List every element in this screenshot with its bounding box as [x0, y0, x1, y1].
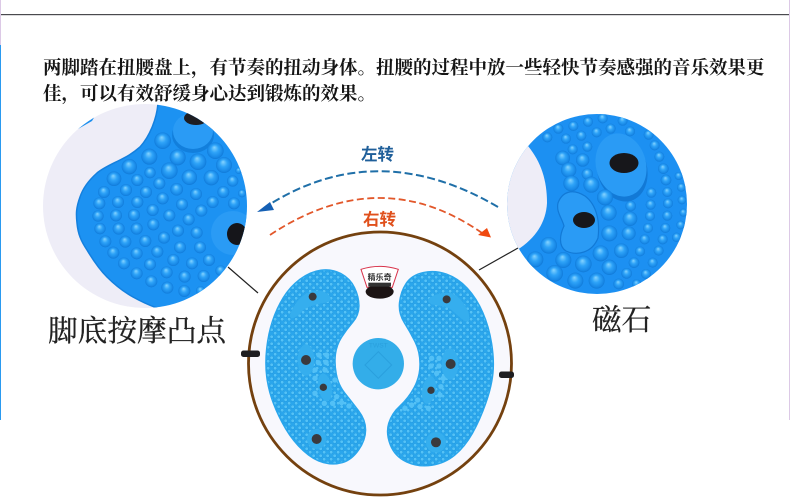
magnified circle: magnet [500, 112, 689, 297]
description text: 佳，可以有效舒缓身心达到锻炼的效果。 [43, 85, 376, 105]
magnet boss, kidney [558, 192, 599, 253]
foot pad: right [387, 272, 493, 466]
magnified circle: massage bumps [43, 103, 255, 310]
center cap: TWST [369, 343, 388, 350]
top rule [0, 14, 790, 15]
pad bosses [290, 291, 334, 449]
label: massage bumps: 脚底按摩凸点 [48, 316, 226, 348]
disc body [248, 232, 512, 495]
magnets [301, 293, 327, 444]
description text: 两脚踏在扭腰盘上，有节奏的扭动身体。扭腰的过程中放一些轻快节奏感强的音乐效果更 [43, 59, 765, 79]
pad bosses [420, 293, 469, 453]
boss with magnet, right [211, 211, 246, 255]
magnets [427, 295, 456, 447]
connector line: massage bumps [228, 267, 258, 293]
label: left turn: 左转 [361, 145, 394, 164]
description text [43, 58, 765, 105]
brand logo [361, 266, 398, 299]
center cap [353, 338, 404, 389]
massage bumps [92, 132, 246, 297]
boss with magnet, top [172, 111, 214, 153]
side tab: left [241, 350, 260, 357]
arrow: right turn [270, 198, 491, 238]
larger inner bumps [402, 356, 446, 411]
massage bumps [527, 113, 687, 289]
label: right turn: 右转 [363, 210, 396, 229]
connector line: magnet [479, 248, 518, 270]
brand logo: 精乐奇 [368, 272, 392, 282]
arrow: left turn [257, 171, 498, 212]
waist twisting disc [241, 232, 514, 495]
magnet boss, large [596, 134, 648, 202]
side tab: right [499, 372, 514, 378]
larger inner bumps [312, 352, 352, 409]
label: magnet: 磁石 [592, 305, 651, 337]
foot pad: left [266, 270, 366, 464]
